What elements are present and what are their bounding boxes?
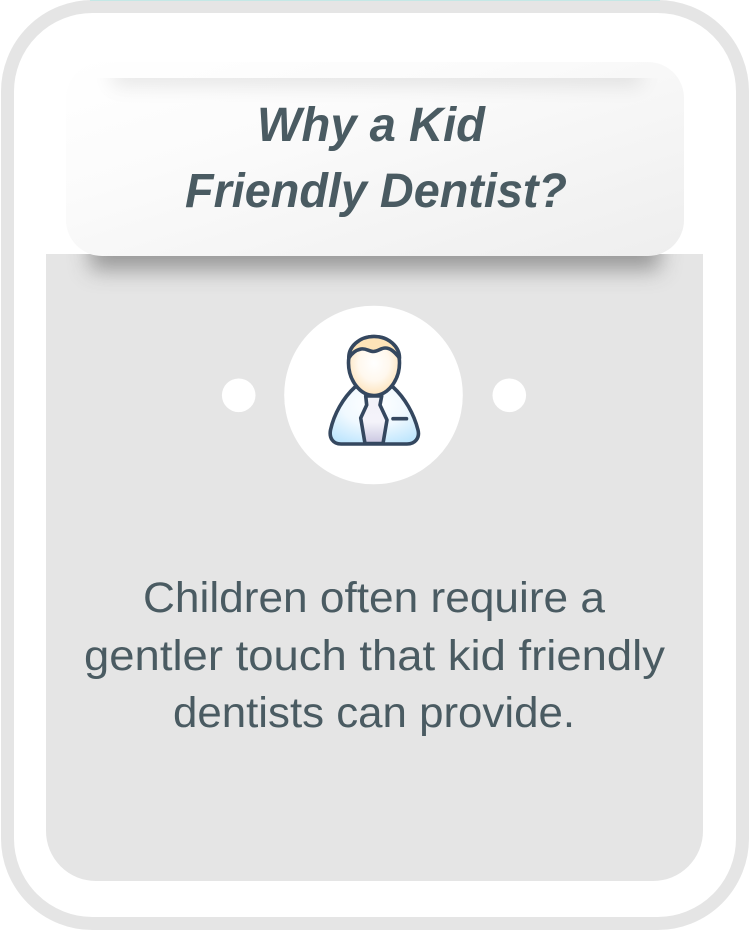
title: [185, 99, 567, 218]
icon circle: [284, 306, 463, 484]
body text: Children often require a: [143, 574, 605, 622]
title: Why a Kid: [257, 99, 487, 152]
top teal hairline: [90, 0, 660, 1]
icon: dentist: [330, 336, 418, 444]
body text: dentists can provide.: [173, 689, 575, 737]
title: Friendly Dentist?: [185, 165, 567, 218]
card shadow: [78, 254, 672, 283]
panel: title card: [90, 78, 684, 256]
white dot left: [222, 378, 256, 412]
panel: grey content area: [46, 254, 703, 881]
body text: gentler touch that kid friendly: [84, 632, 666, 680]
body text: [84, 574, 666, 737]
white dot right: [492, 378, 526, 412]
